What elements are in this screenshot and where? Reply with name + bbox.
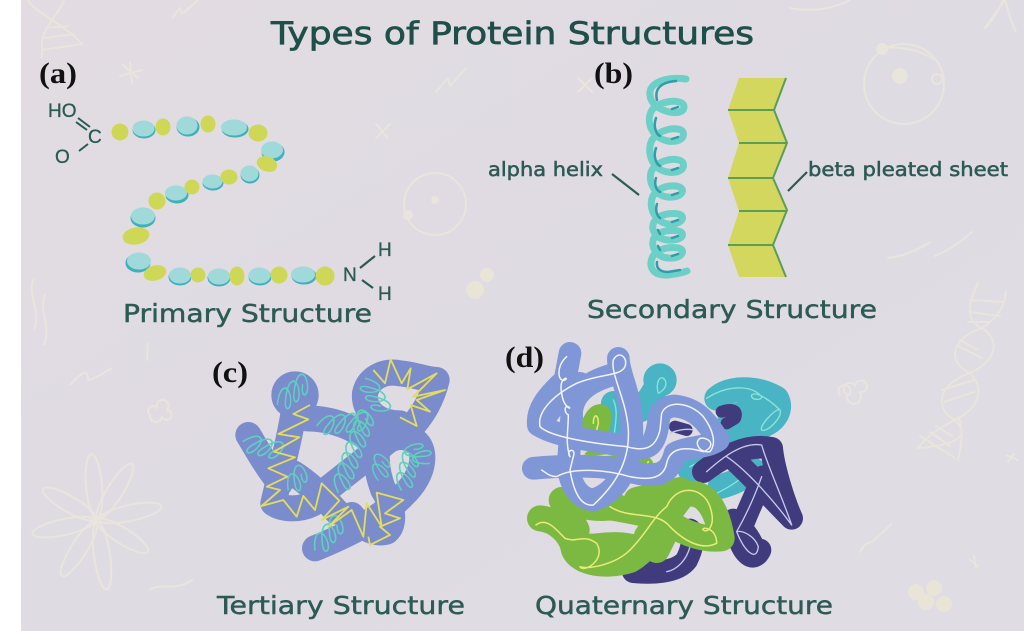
caption: tertiary structure: Tertiary Structure bbox=[216, 591, 465, 620]
panel: primary structure bbox=[39, 57, 392, 328]
carboxyl group: O bbox=[55, 147, 70, 168]
label (c): (c) bbox=[212, 356, 248, 389]
alpha helix coil bbox=[649, 78, 687, 275]
amine group bbox=[343, 240, 392, 305]
carboxyl group: HO bbox=[48, 101, 76, 122]
amine group: N bbox=[343, 265, 357, 286]
caption: secondary structure: Secondary Structure bbox=[587, 295, 877, 324]
caption: quaternary structure: Quaternary Structure bbox=[535, 591, 833, 620]
caption: primary structure: Primary Structure bbox=[123, 299, 372, 328]
label (a): (a) bbox=[39, 57, 77, 90]
teal subunit bbox=[610, 372, 780, 493]
title: Types of Protein Structures bbox=[270, 16, 754, 52]
panel: secondary structure bbox=[488, 57, 1008, 324]
amine group: H bbox=[378, 284, 392, 305]
label: alpha helix bbox=[488, 158, 639, 195]
chain of amino acid beads bbox=[112, 116, 334, 286]
blue subunit bbox=[533, 353, 718, 505]
quaternary protein complex bbox=[533, 353, 792, 572]
label: beta pleated sheet bbox=[788, 158, 1008, 191]
label (b): (b) bbox=[594, 57, 633, 90]
label: beta pleated sheet: beta pleated sheet bbox=[808, 158, 1008, 181]
green subunit bbox=[536, 413, 722, 568]
amine group: H bbox=[378, 240, 392, 261]
carboxyl group: C bbox=[88, 127, 102, 148]
panel: quaternary structure bbox=[505, 341, 833, 620]
label: alpha helix: alpha helix bbox=[488, 158, 603, 181]
navy subunit bbox=[633, 410, 792, 572]
label (d): (d) bbox=[505, 341, 544, 374]
carboxyl group bbox=[48, 101, 102, 168]
tertiary protein fold bbox=[240, 359, 445, 555]
panel: tertiary structure bbox=[212, 356, 465, 620]
beta pleated sheet bbox=[728, 78, 787, 277]
